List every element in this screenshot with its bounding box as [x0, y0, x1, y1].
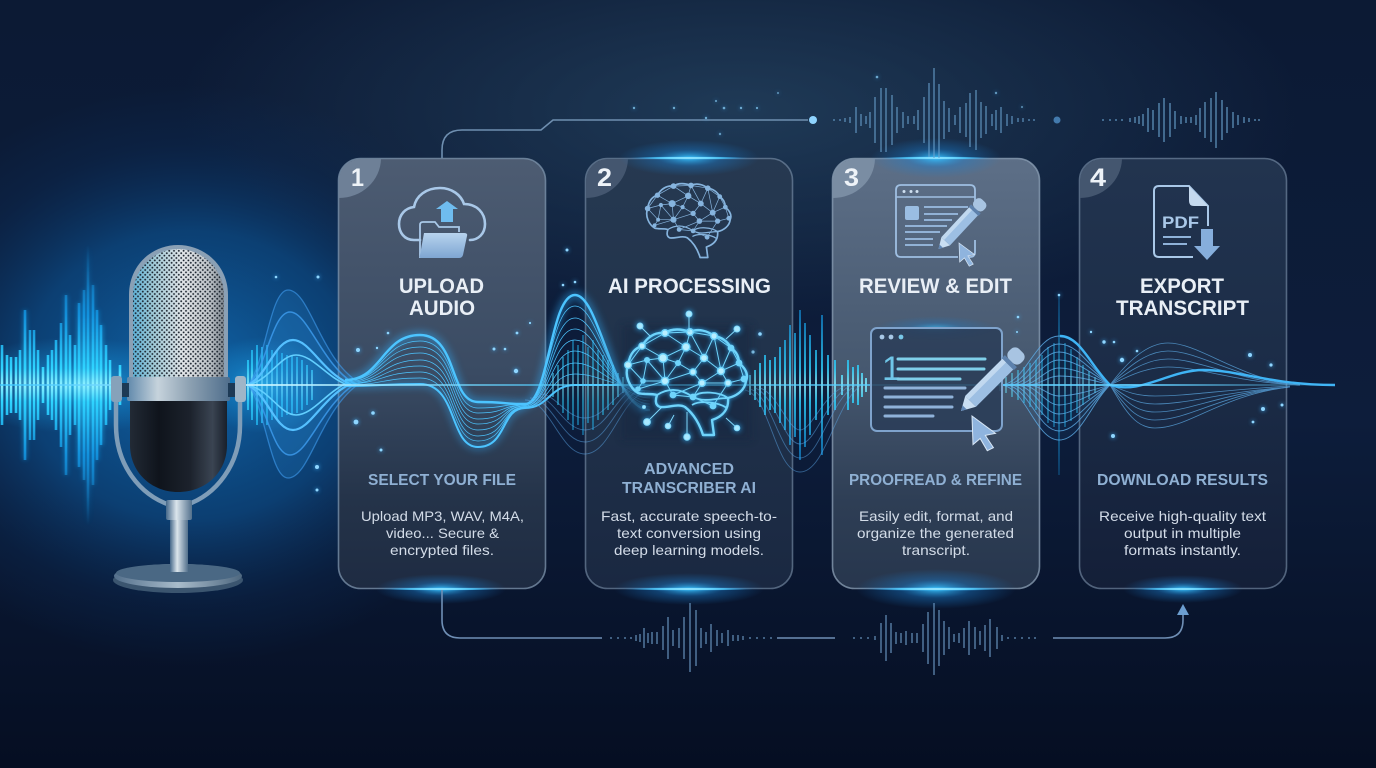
panel: step 2 ai processing	[586, 158, 792, 588]
bottom waveform 1	[611, 603, 771, 672]
lower faint lobes	[525, 386, 860, 472]
icon: document with pencil	[896, 185, 988, 266]
left waveform bars	[0, 245, 200, 525]
pencil	[955, 345, 1027, 417]
top connector line	[442, 116, 817, 158]
description: video... Secure &	[386, 525, 500, 541]
description: output in multiple	[1124, 525, 1241, 541]
glowing hub nodes	[625, 329, 730, 386]
top waveform 1	[834, 68, 1034, 158]
particles	[275, 76, 1284, 491]
heading: UPLOAD	[399, 275, 484, 298]
small dot	[1054, 116, 1060, 124]
number badge 3: 3	[844, 164, 859, 192]
cursor	[972, 416, 995, 451]
description: organize the generated	[857, 525, 1014, 541]
description: formats instantly.	[1124, 542, 1241, 558]
stand	[113, 500, 243, 593]
center signal line	[0, 382, 1335, 388]
description	[1099, 508, 1266, 558]
heading: AUDIO	[409, 297, 475, 320]
illustration: microphone	[111, 245, 246, 593]
band	[127, 377, 230, 401]
left lobes near microphone	[248, 290, 360, 478]
description: encrypted files.	[390, 542, 494, 558]
yoke	[116, 400, 240, 505]
main ribbon glow	[345, 295, 650, 447]
icon: cloud upload folder	[399, 188, 485, 258]
description: Receive high-quality text	[1099, 508, 1266, 524]
description	[361, 508, 524, 558]
description: transcript.	[902, 542, 970, 558]
number badge 2	[586, 159, 628, 198]
subheading: DOWNLOAD RESULTS	[1097, 472, 1268, 489]
description: deep learning models.	[614, 542, 764, 558]
soundwave ribbons and bars	[0, 290, 1335, 478]
icon: pdf download	[1154, 186, 1220, 260]
heading	[399, 275, 484, 320]
bottom waveform 2	[854, 603, 1035, 675]
arrow head	[1177, 604, 1189, 615]
icon: pdf download: PDF	[1162, 213, 1199, 232]
panel: step 3 review and edit	[832, 158, 1040, 588]
number badge 3	[833, 159, 875, 198]
number badge 2: 2	[597, 164, 612, 192]
icon: small brain	[645, 183, 731, 258]
subheading: SELECT YOUR FILE	[368, 472, 516, 489]
number badge 1: 1	[351, 164, 364, 192]
description: Fast, accurate speech-to-	[601, 508, 777, 524]
glow beside microphone	[197, 337, 327, 433]
panel: step 4 export transcript	[1080, 158, 1286, 588]
illustration: transcript editor window	[871, 316, 1027, 451]
connector dot	[809, 116, 817, 124]
heading: REVIEW & EDIT	[859, 275, 1012, 298]
pivots	[111, 376, 246, 402]
subheading	[622, 461, 756, 497]
capsule head	[129, 245, 228, 377]
heading	[1116, 275, 1249, 320]
subheading: TRANSCRIBER AI	[622, 480, 756, 497]
heading: AI PROCESSING	[608, 275, 771, 298]
description: Easily edit, format, and	[859, 508, 1013, 524]
description: Upload MP3, WAV, M4A,	[361, 508, 524, 524]
subheading: ADVANCED	[644, 461, 734, 478]
main ribbon lines	[345, 295, 650, 447]
description	[857, 508, 1014, 558]
illustration: transcript editor window: 1	[882, 350, 901, 388]
right ribbon	[1110, 343, 1300, 428]
card edge glows	[376, 138, 1243, 609]
heading: TRANSCRIPT	[1116, 297, 1249, 320]
subheading: PROOFREAD & REFINE	[849, 472, 1022, 489]
lower body	[130, 400, 227, 492]
right lobes	[1000, 336, 1110, 440]
number badge 4	[1080, 159, 1122, 198]
number badge 4: 4	[1090, 164, 1106, 192]
heading: EXPORT	[1140, 275, 1224, 298]
illustration: glowing neural brain	[622, 311, 752, 440]
panel: step 1 upload audio	[338, 158, 546, 588]
number badge 1	[339, 159, 381, 198]
bottom connector with arrow	[442, 590, 1189, 638]
description: text conversion using	[617, 525, 761, 541]
bars behind ribbons	[248, 295, 1095, 475]
description	[601, 508, 777, 558]
top waveform 2	[1103, 92, 1259, 148]
satellite nodes	[637, 311, 740, 440]
